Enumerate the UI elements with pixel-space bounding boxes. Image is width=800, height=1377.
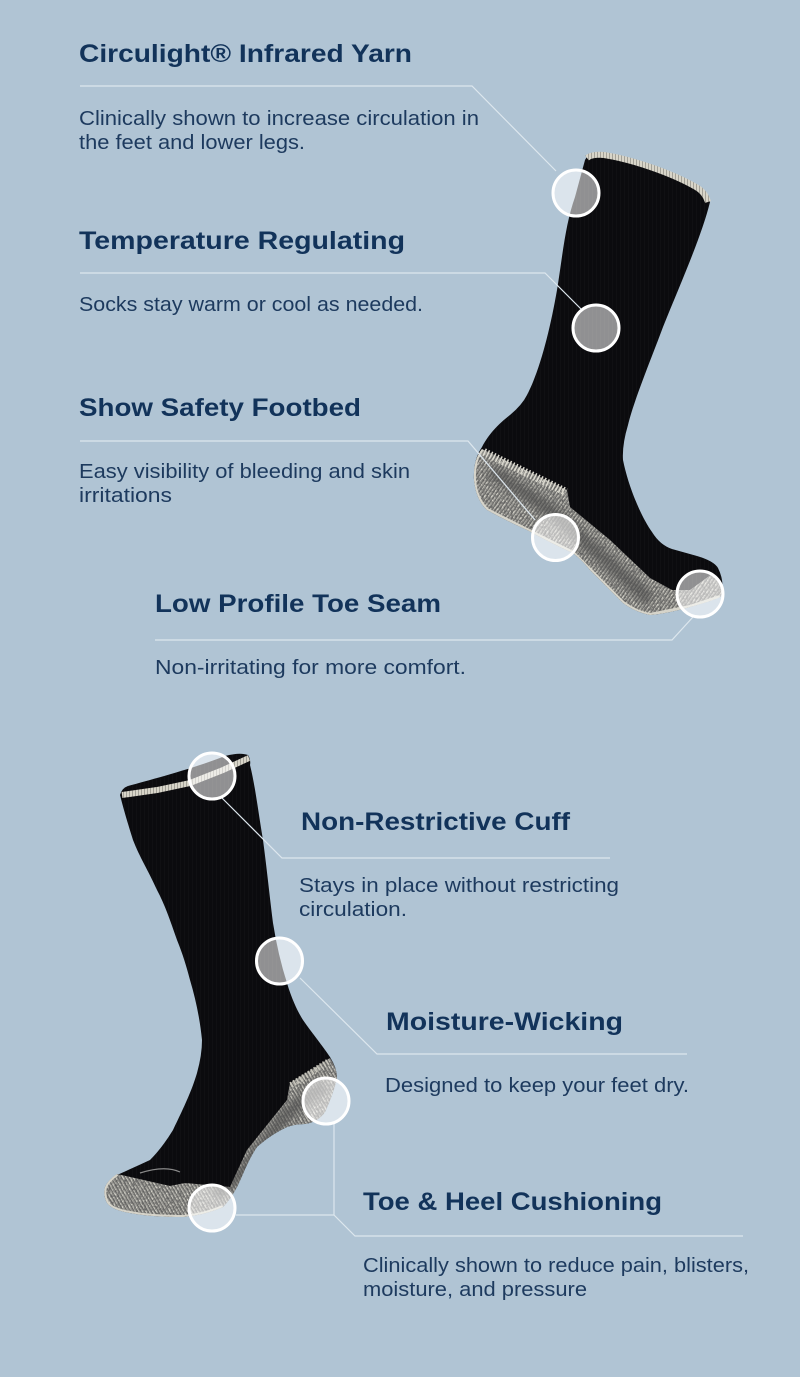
feature: Show Safety Footbed: Show Safety Footbed (79, 394, 361, 422)
feature: Non-Restrictive Cuff: circulation. (299, 899, 407, 921)
feature: Circulight Infrared Yarn: Clinically shown to increase circulation in (79, 108, 479, 130)
feature: Circulight Infrared Yarn: Circulight® Infrared Yarn (79, 40, 412, 68)
feature: Circulight Infrared Yarn: the feet and lower legs. (79, 132, 305, 154)
feature: Low Profile Toe Seam: Non-irritating for more comfort. (155, 657, 466, 679)
feature: Moisture-Wicking: Designed to keep your feet dry. (385, 1075, 689, 1097)
feature: Moisture-Wicking (385, 1008, 689, 1097)
feature: Non-Restrictive Cuff: Non-Restrictive Cuff (301, 808, 571, 836)
infographic canvas (79, 44, 748, 1300)
feature: Non-Restrictive Cuff (299, 808, 619, 921)
feature: Temperature Regulating (79, 227, 423, 316)
feature: Moisture-Wicking: Moisture-Wicking (386, 1008, 623, 1036)
feature: Toe and Heel Cushioning (363, 1188, 749, 1301)
sock: sole view, bottom (95, 754, 345, 1225)
feature: Show Safety Footbed: Easy visibility of bleeding and skin (79, 461, 410, 483)
sock: side view, top (465, 153, 730, 625)
feature: Circulight Infrared Yarn (79, 40, 479, 154)
feature: Show Safety Footbed (79, 394, 410, 507)
feature: Low Profile Toe Seam (155, 590, 466, 679)
markers on top sock (532, 170, 723, 617)
feature: Non-Restrictive Cuff: Stays in place without restricting (299, 875, 619, 897)
feature: Show Safety Footbed: irritations (79, 485, 172, 507)
feature: Temperature Regulating: Socks stay warm or cool as needed. (79, 294, 423, 316)
feature: Low Profile Toe Seam: Low Profile Toe Seam (155, 590, 441, 618)
feature: Temperature Regulating: Temperature Regulating (79, 227, 405, 255)
feature: Toe and Heel Cushioning: moisture, and pressure (363, 1279, 587, 1301)
markers on bottom sock (189, 753, 349, 1231)
feature: Toe and Heel Cushioning: Clinically shown to reduce pain, blisters, (363, 1255, 749, 1277)
feature: Toe and Heel Cushioning: Toe & Heel Cushioning (363, 1188, 662, 1216)
connector lines (80, 86, 743, 1236)
